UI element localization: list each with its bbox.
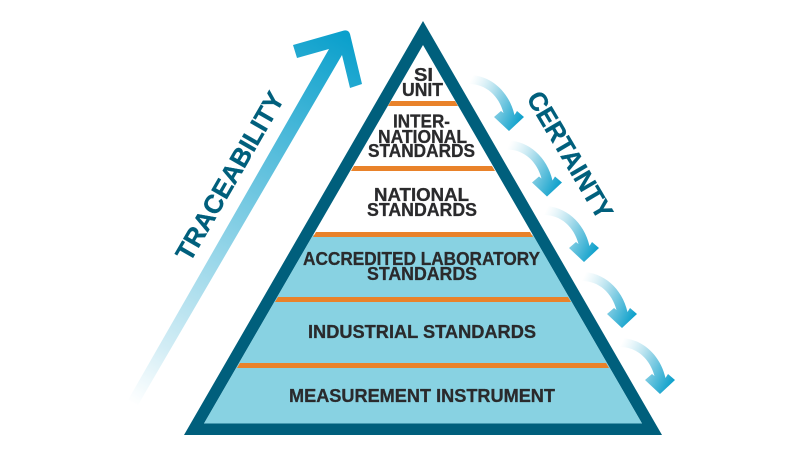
white upper tiers	[204, 45, 642, 424]
tier label: SI unit: UNIT	[402, 79, 444, 100]
tier label: international standards: NATIONAL	[378, 126, 467, 147]
orange divider 4	[275, 297, 571, 302]
pyramid outline	[184, 21, 662, 435]
curved arrow 2	[507, 140, 562, 196]
orange divider 5	[237, 363, 609, 368]
label: traceability: TRACEABILITY	[169, 86, 290, 266]
tier label: accredited laboratory standards: ACCREDITED LABORATORY	[303, 248, 541, 269]
tier label: international standards	[368, 110, 475, 161]
tier label: SI unit: SI	[414, 64, 433, 85]
tier label: accredited laboratory standards: STANDARDS	[367, 263, 477, 284]
orange divider 1	[388, 101, 458, 106]
tier label: measurement instrument: MEASUREMENT INSTRUMENT	[289, 385, 556, 406]
tier label: international standards: STANDARDS	[368, 140, 475, 161]
tier label: SI unit	[402, 64, 444, 100]
label: certainty: CERTAINTY	[521, 86, 619, 224]
curved arrow 5	[620, 338, 675, 394]
tier label: accredited laboratory standards	[303, 248, 541, 284]
light blue lower tiers	[204, 235, 642, 424]
curved arrow 3	[544, 206, 599, 262]
orange divider 3	[313, 232, 533, 237]
tier label: national standards	[367, 184, 477, 220]
tier label: national standards: STANDARDS	[367, 199, 477, 220]
tier label: industrial standards: INDUSTRIAL STANDARDS	[308, 321, 536, 342]
certainty curved arrows	[469, 75, 675, 394]
curved arrow 1	[469, 75, 524, 131]
curved arrow 4	[582, 272, 637, 328]
tier label: international standards: INTER-	[393, 110, 450, 132]
pyramid	[184, 21, 662, 435]
traceability arrow	[128, 30, 362, 405]
orange divider 2	[351, 166, 495, 171]
tier label: national standards: NATIONAL	[374, 184, 469, 205]
